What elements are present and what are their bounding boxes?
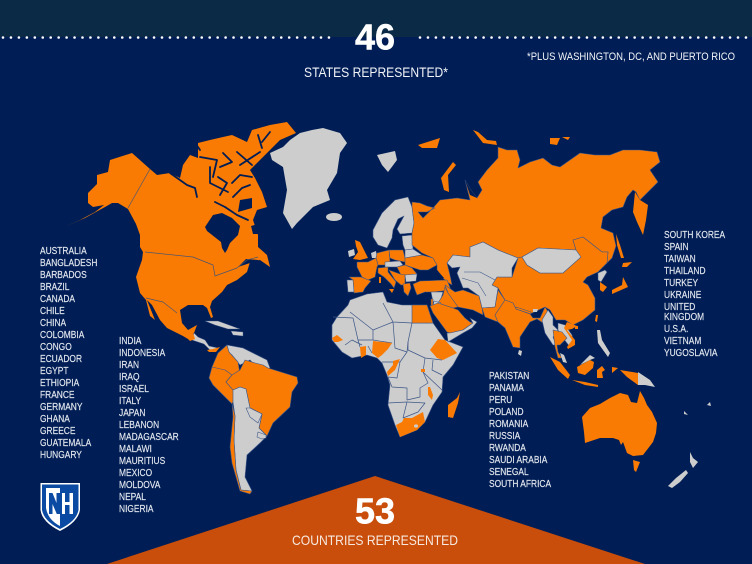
Philippines <box>597 330 610 357</box>
Foxe Basin and Gulf of St Lawrence <box>238 198 262 267</box>
country list column 4: UNITED KINGDOM <box>664 302 704 323</box>
Kamchatka, Sakhalin, Japan and Arctic islands <box>418 130 648 322</box>
South Africa <box>396 412 425 437</box>
Mongolia and Central Asia <box>447 242 607 308</box>
US borders <box>128 169 258 313</box>
Canadian arctic channels <box>170 132 270 220</box>
Egypt <box>412 305 433 323</box>
Ghana <box>360 346 366 358</box>
dotted divider left <box>3 36 334 39</box>
shield body <box>42 484 78 529</box>
Middle East and South Asia <box>413 280 578 363</box>
Malawi <box>428 387 433 400</box>
shield left panel <box>46 488 60 526</box>
Black Sea and Caspian <box>417 180 477 292</box>
country list column 3: PAKISTAN PANAMA PERU POLAND ROMANIA RUSSIA RWANDA SAUDI ARABIA SENEGAL SOUTH AFRICA <box>489 371 551 490</box>
top band <box>0 0 752 37</box>
stat: 53: 53 <box>355 490 395 532</box>
UNH shield logo <box>40 483 80 531</box>
South America <box>209 345 298 494</box>
triangle banner <box>107 476 645 564</box>
world map <box>64 122 711 494</box>
Australia <box>582 391 657 456</box>
letter N <box>49 493 60 514</box>
stat: 46: 46 <box>355 16 395 58</box>
Greenland and Iceland <box>270 128 397 229</box>
Indonesia <box>550 357 638 387</box>
New Zealand <box>690 452 698 468</box>
Ethiopia <box>430 339 457 360</box>
stat label: states represented: STATES REPRESENTED* <box>304 64 448 80</box>
Madagascar <box>448 392 460 418</box>
country list column 2: INDIA INDONESIA IRAN IRAQ ISRAEL ITALY JAPAN LEBANON MADAGASCAR MALAWI MAURITIUS MEXICO MOLDOVA NEPAL NIGERIA <box>119 336 179 515</box>
Senegal <box>332 335 343 342</box>
Central America and Caribbean <box>192 321 243 352</box>
Russia <box>412 147 660 285</box>
Hudson Bay <box>205 213 240 253</box>
country list column 1: AUSTRALIA BANGLADESH BARBADOS BRAZIL CANADA CHILE CHINA COLOMBIA CONGO ECUADOR EGYPT ETHIOPIA FRANCE GERMANY GHANA GREECE GUATEMALA HUNGARY <box>40 246 97 461</box>
Southeast Asia and Pacific islands <box>550 330 711 488</box>
dotted divider right <box>420 36 751 39</box>
small islands <box>707 402 711 406</box>
Congo <box>387 359 400 376</box>
China <box>492 237 608 325</box>
Africa <box>332 292 463 437</box>
letter H <box>62 493 73 514</box>
shield outline <box>40 483 80 531</box>
Rwanda <box>421 369 425 372</box>
African borders <box>333 303 442 418</box>
Guatemala and Panama <box>186 333 220 352</box>
country list column 4: SOUTH KOREA SPAIN TAIWAN THAILAND TURKEY UKRAINE U.S.A. VIETNAM YUGOSLAVIA <box>664 230 725 359</box>
North America <box>64 122 296 339</box>
stat label: countries represented: COUNTRIES REPRESENTED <box>292 532 458 548</box>
Nigeria <box>372 341 392 358</box>
Europe <box>347 197 437 296</box>
